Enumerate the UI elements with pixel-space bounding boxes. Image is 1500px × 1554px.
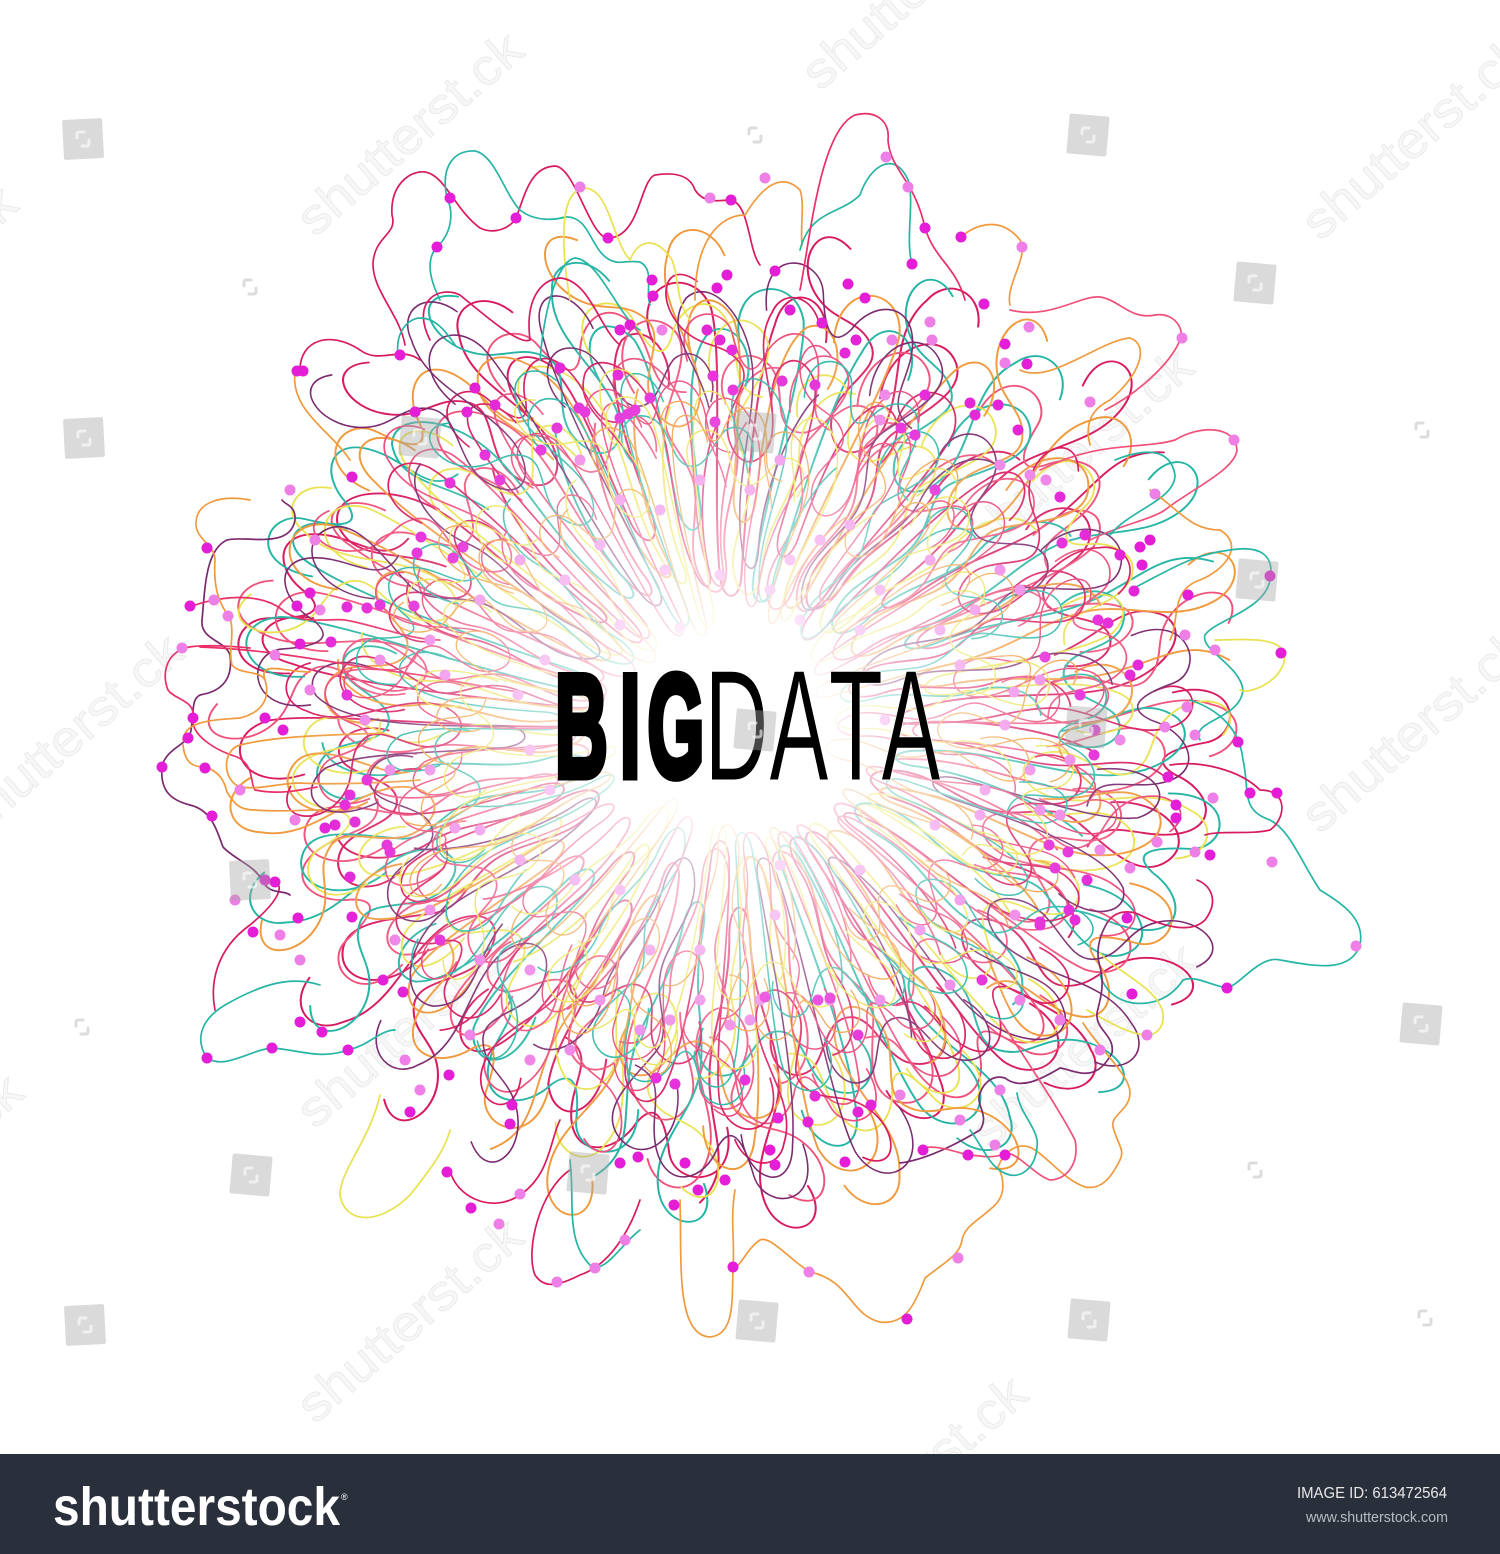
footer url: www.shutterstock.com — [1305, 1509, 1448, 1526]
watermark text: shutterst.ck — [955, 337, 1204, 563]
footer image id: IMAGE ID: 613472564 — [1297, 1485, 1447, 1502]
watermark text: shutterst.ck — [960, 932, 1209, 1158]
data points: pale nodes — [182, 157, 1356, 1282]
small watermark glyphs — [76, 128, 1431, 1325]
title word: BIG: BIG — [555, 646, 704, 808]
outer traced contour lines — [162, 114, 1361, 1337]
watermark text: shutterst.ck — [285, 20, 534, 246]
centre fade overlay — [279, 304, 1182, 1146]
watermark text: shutterst.ck — [285, 912, 534, 1138]
title: BIG DATA — [555, 638, 941, 815]
watermark square glyphs — [77, 128, 1427, 1332]
title word: DATA: DATA — [704, 638, 941, 815]
footer logo: shutterstock — [53, 1477, 341, 1537]
watermark squares — [62, 113, 1443, 1346]
footer bar — [0, 1454, 1500, 1554]
footer registered mark: ® — [341, 1492, 348, 1502]
data points: bright nodes — [162, 198, 1281, 1319]
watermark text: shutterst.ck — [285, 1207, 534, 1433]
